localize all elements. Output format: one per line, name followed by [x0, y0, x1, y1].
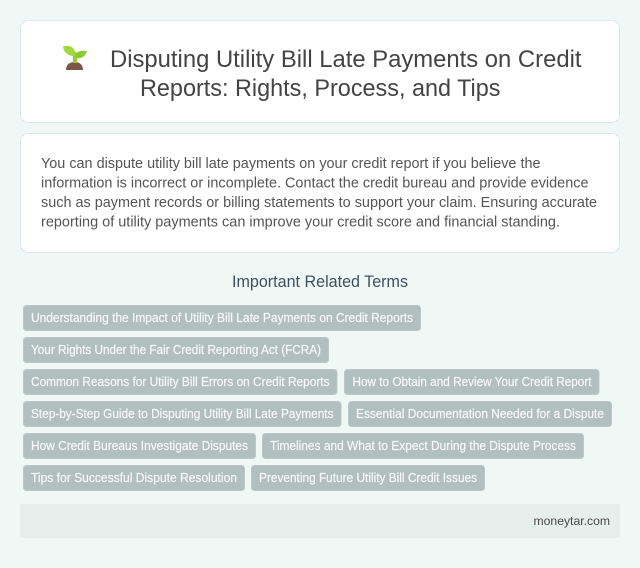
- chip: [24, 402, 341, 426]
- summary text: such as payment records or billing statements to support your claim. Ensuring accurate: [41, 195, 597, 211]
- chip: Your Rights Under the Fair Credit Reporting Act (FCRA): [31, 343, 321, 357]
- chip: Understanding the Impact of Utility Bill Late Payments on Credit Reports: [31, 311, 413, 325]
- chip: [24, 338, 328, 362]
- chip: Tips for Successful Dispute Resolution: [31, 471, 237, 485]
- title text: Disputing Utility Bill Late Payments on Credit: [110, 46, 582, 73]
- summary text: reporting of utility payments can improve your credit score and financial standing.: [41, 214, 560, 230]
- chip: Timelines and What to Expect During the Dispute Process: [270, 439, 576, 453]
- chip: Essential Documentation Needed for a Dispute: [356, 407, 604, 421]
- chip: [344, 370, 599, 394]
- footer: [20, 504, 620, 538]
- chip: [24, 434, 256, 458]
- chip: [24, 370, 337, 394]
- related terms chips: [24, 306, 612, 490]
- icon: seedling: [63, 46, 87, 70]
- chip: [262, 434, 584, 458]
- summary text: information is incorrect or incomplete. Contact the credit bureau and provide evidence: [41, 176, 588, 192]
- title text: [110, 46, 582, 102]
- chip: [348, 402, 612, 426]
- footer source text: moneytar.com: [534, 514, 610, 528]
- panel: summary: [20, 134, 620, 252]
- chip: Common Reasons for Utility Bill Errors on Credit Reports: [31, 375, 330, 389]
- chip: [252, 466, 484, 490]
- title text: Reports: Rights, Process, and Tips: [140, 75, 500, 102]
- chip: [24, 466, 244, 490]
- panel: title: [20, 20, 620, 122]
- chip: Step-by-Step Guide to Disputing Utility Bill Late Payments: [31, 407, 334, 421]
- chip: [24, 306, 420, 330]
- chip: How Credit Bureaus Investigate Disputes: [31, 439, 248, 453]
- chip: How to Obtain and Review Your Credit Report: [352, 375, 592, 389]
- chip: Preventing Future Utility Bill Credit Issues: [259, 471, 477, 485]
- summary text: [41, 156, 597, 230]
- summary text: You can dispute utility bill late payments on your credit report if you believe the: [41, 156, 540, 172]
- heading: related terms: Important Related Terms: [232, 273, 408, 291]
